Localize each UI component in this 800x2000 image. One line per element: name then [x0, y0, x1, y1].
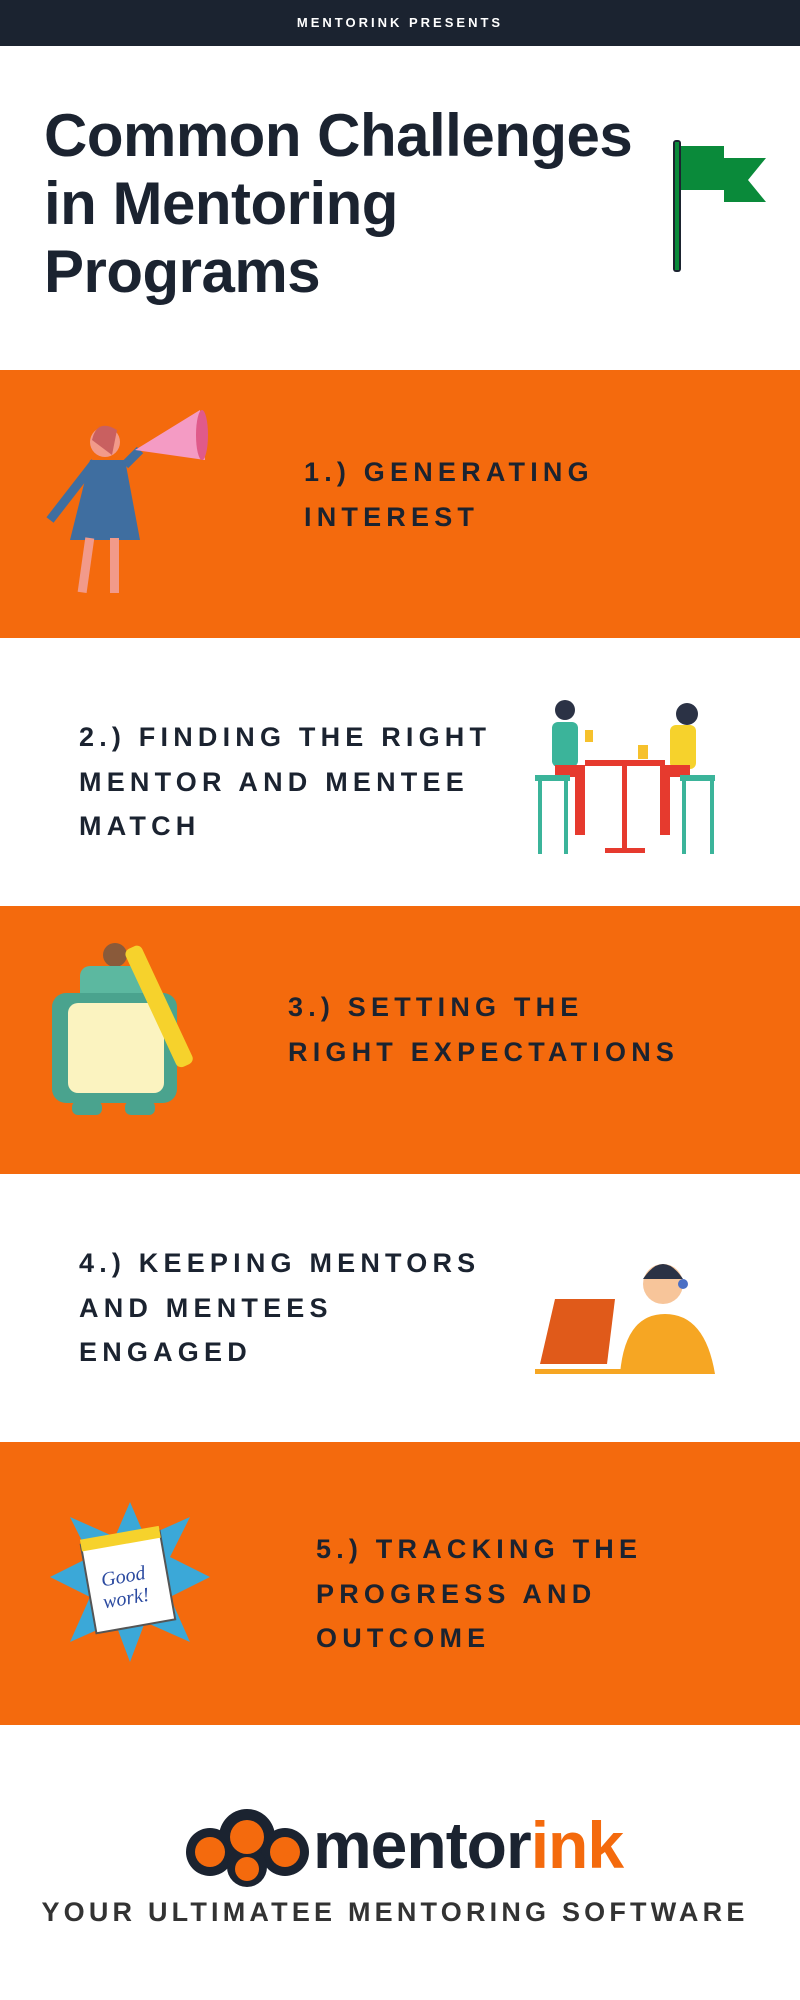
heading: 4.) KEEPING MENTORS — [79, 1248, 480, 1278]
icon: good work badge — [50, 1502, 210, 1662]
panel: 3 setting expectations — [0, 906, 800, 1174]
icon: woman with megaphone — [46, 410, 208, 593]
title — [44, 102, 632, 305]
heading: 1.) GENERATING — [304, 457, 594, 487]
heading: AND MENTEES — [79, 1292, 333, 1322]
icon: person at laptop — [535, 1264, 715, 1374]
heading: MATCH — [79, 811, 200, 841]
title: Common Challenges — [44, 102, 632, 169]
heading — [304, 457, 594, 532]
heading: OUTCOME — [316, 1623, 490, 1653]
heading — [79, 1248, 480, 1367]
icon: person with tablet and pencil — [52, 943, 193, 1115]
heading: PROGRESS AND — [316, 1578, 596, 1608]
panel: 4 keeping engaged — [79, 1248, 715, 1374]
logo text: mentorink — [313, 1808, 623, 1882]
heading: RIGHT EXPECTATIONS — [288, 1036, 679, 1066]
icon: two people at table — [535, 700, 715, 854]
heading — [316, 1534, 642, 1653]
icon: good work badge: Good — [99, 1562, 148, 1591]
panel: 2 finding match — [79, 700, 715, 854]
panel: 1 generating interest — [0, 370, 800, 638]
panel: 5 tracking progress — [0, 1442, 800, 1725]
title: in Mentoring — [44, 170, 398, 237]
icon: flag — [673, 140, 766, 272]
heading: 2.) FINDING THE RIGHT — [79, 722, 491, 752]
heading — [288, 992, 679, 1066]
footer logo — [186, 1808, 624, 1887]
title: Programs — [44, 238, 320, 305]
tagline: YOUR ULTIMATEE MENTORING SOFTWARE — [41, 1897, 749, 1927]
icon: good work badge: work! — [101, 1584, 151, 1613]
heading: MENTOR AND MENTEE — [79, 766, 469, 796]
top bar: MENTORINK PRESENTS — [297, 15, 503, 30]
top bar — [0, 0, 800, 46]
heading: INTEREST — [304, 502, 479, 532]
icon: logo cloud — [186, 1809, 309, 1887]
heading: 3.) SETTING THE — [288, 992, 584, 1022]
heading: ENGAGED — [79, 1337, 252, 1367]
heading: 5.) TRACKING THE — [316, 1534, 642, 1564]
heading — [79, 722, 491, 841]
